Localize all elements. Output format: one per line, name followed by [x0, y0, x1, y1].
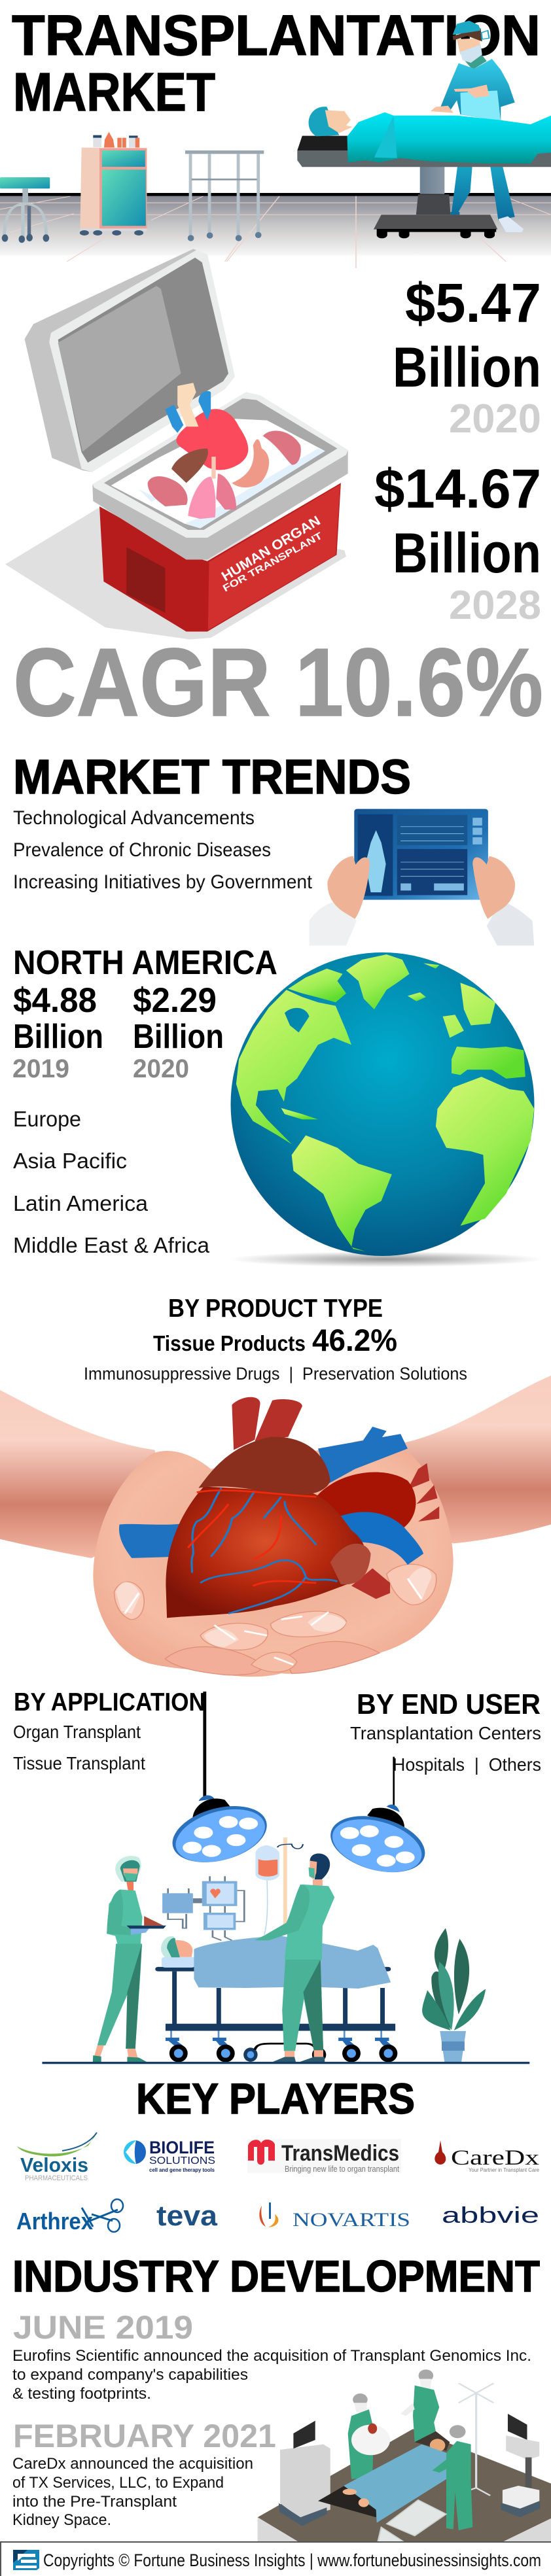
logo: Arthrex [16, 2199, 123, 2235]
logo: Novartis: NOVARTIS [293, 2209, 410, 2231]
title: TRANSPLANTATION [12, 4, 541, 67]
box body [99, 483, 341, 631]
surgical lamp left [155, 1692, 285, 1874]
logo: BioLife Solutions: SOLUTIONS [149, 2155, 215, 2167]
logo: TransMedics: Bringing new life to organ transplant [285, 2164, 399, 2174]
heading: key players: KEY PLAYERS [136, 2074, 415, 2123]
June 2019 event: & testing footprints. [12, 2385, 151, 2403]
floor [0, 193, 551, 268]
logo: Veloxis: PHARMACEUTICALS [25, 2174, 88, 2182]
June 2019 event [12, 2309, 531, 2403]
ventilator [501, 2414, 540, 2517]
June 2019 event: Eurofins Scientific announced the acquisition of Transplant Genomics Inc. [12, 2347, 531, 2365]
IV stand [457, 2383, 493, 2496]
logo: Novartis [259, 2202, 410, 2231]
stat: North America 2020 [133, 981, 224, 1083]
list: applications: Organ Transplant [13, 1722, 141, 1742]
list: regions: Latin America [13, 1191, 149, 1215]
heading: by product type: BY PRODUCT TYPE [168, 1295, 383, 1323]
surgeon holding organ box [348, 2393, 390, 2479]
illustration: hands holding tablet [310, 809, 534, 945]
list: end users: Hospitals | Others [393, 1754, 541, 1775]
list: regions [13, 1107, 210, 1257]
stat: North America 2019: Billion [13, 1018, 103, 1056]
stat: North America 2019: $4.88 [13, 981, 97, 1020]
February 2021 event [12, 2418, 276, 2529]
footer [0, 2541, 551, 2576]
heading: market trends: MARKET TRENDS [13, 750, 411, 804]
floor shadow [5, 508, 346, 639]
title [12, 4, 541, 122]
illustration: globe [229, 952, 543, 1267]
list: regions: Asia Pacific [13, 1149, 127, 1173]
surgical lamp right [313, 1757, 442, 1884]
surgeon standing [400, 2369, 439, 2442]
medicine cabinet [80, 132, 147, 235]
stat: North America 2020: $2.29 [133, 981, 217, 1020]
logo: CareDx: CareDx [451, 2146, 540, 2170]
logo: BioLife Solutions: cell and gene therapy tools [149, 2167, 215, 2173]
stool [0, 177, 50, 243]
stat: North America 2019 [12, 981, 103, 1083]
icon: Fortune Business Insights logo [13, 2550, 39, 2570]
ice [111, 419, 325, 529]
illustration: hands holding heart [0, 1376, 551, 1677]
instrument rack [185, 150, 264, 241]
list: market trends: Prevalence of Chronic Diseases [13, 839, 271, 861]
heart [119, 1397, 439, 1618]
heading: north america: NORTH AMERICA [13, 944, 277, 982]
box label: FOR TRANSPLANT [221, 531, 324, 594]
box rim [92, 392, 348, 559]
list: applications [13, 1722, 145, 1773]
nurse [93, 1856, 166, 2062]
patient on bed [318, 2431, 450, 2523]
continents [236, 954, 534, 1251]
stat: North America 2019: 2019 [12, 1054, 69, 1083]
stat: tissue products share [153, 1323, 397, 1357]
instrument trolley [378, 2500, 446, 2542]
room floor [258, 2429, 551, 2542]
anaesthesia cart [279, 2421, 330, 2526]
logo: BioLife Solutions [124, 2138, 215, 2173]
February 2021 event: of TX Services, LLC, to Expand [12, 2474, 224, 2492]
stat: 2028 market size: $14.67 [374, 458, 541, 519]
arms [0, 1376, 551, 1558]
heart and organs [148, 383, 301, 519]
front fingers [125, 1578, 421, 1672]
illustration: operating theatre [42, 1692, 529, 2064]
surgeon [255, 1853, 334, 2062]
stat: 2020 market size: $5.47 [405, 272, 541, 334]
logo: CareDx: Your Partner in Transplant Care [469, 2167, 540, 2173]
heading: by end user: BY END USER [357, 1688, 541, 1720]
stat: 2028 market size: 2028 [449, 583, 541, 628]
illustration: organ cooler box [5, 249, 348, 639]
June 2019 event: to expand company's capabilities [12, 2366, 248, 2384]
surgeon [431, 21, 524, 232]
lid [25, 249, 235, 472]
list: regions: Middle East & Africa [13, 1233, 210, 1257]
stat: 2020 market size: 2020 [449, 396, 541, 442]
logo: TransMedics [247, 2139, 401, 2174]
logo: CareDx [435, 2140, 540, 2173]
stat: tissue products share: 46.2% [312, 1323, 397, 1357]
illustration: operating room [0, 21, 551, 268]
heading: by application: BY APPLICATION [14, 1688, 205, 1716]
illustration: transplant surgery team [258, 2369, 551, 2542]
list: market trends [13, 807, 313, 893]
patient on table [297, 107, 551, 238]
box label: HUMAN ORGAN [219, 513, 323, 584]
February 2021 event: into the Pre-Transplant [12, 2493, 177, 2511]
logo: AbbVie: abbvie [442, 2203, 539, 2228]
logo: TransMedics: TransMedics [281, 2141, 399, 2166]
floor line [42, 2062, 529, 2064]
monitors [162, 1876, 244, 1940]
logo: BioLife Solutions: BIOLIFE [149, 2138, 215, 2157]
list: market trends: Increasing Initiatives by Government [13, 871, 313, 893]
stretcher and patient [155, 1936, 397, 2063]
stat: North America 2020: Billion [133, 1018, 224, 1056]
stat: tissue products share: Tissue Products [153, 1331, 306, 1355]
stat: North America 2020: 2020 [133, 1054, 189, 1083]
February 2021 event: Kidney Space. [12, 2511, 111, 2529]
list: end users [350, 1723, 541, 1775]
list: market trends: Technological Advancements [13, 807, 255, 829]
logo: Arthrex: Arthrex [16, 2208, 93, 2235]
stat: 2020 market size [393, 272, 541, 442]
IV drip stand [255, 1837, 303, 1935]
list: regions: Europe [13, 1107, 81, 1131]
logo: Veloxis [17, 2132, 97, 2182]
logo: teva: teva [156, 2200, 218, 2232]
June 2019 event: JUNE 2019 [13, 2309, 193, 2346]
logo: Veloxis: Veloxis [20, 2153, 88, 2176]
potted plant [422, 1928, 486, 2062]
list: applications: Tissue Transplant [13, 1753, 145, 1773]
title: MARKET [13, 61, 215, 122]
product type list: Immunosuppressive Drugs | Preservation Solutions [84, 1364, 467, 1384]
cupped hands [93, 1440, 453, 1677]
February 2021 event: FEBRUARY 2021 [13, 2418, 276, 2454]
list: end users: Transplantation Centers [350, 1723, 541, 1743]
stat: 2028 market size [374, 458, 541, 628]
February 2021 event: CareDx announced the acquisition [12, 2455, 253, 2473]
surgeon foreground [433, 2425, 472, 2530]
